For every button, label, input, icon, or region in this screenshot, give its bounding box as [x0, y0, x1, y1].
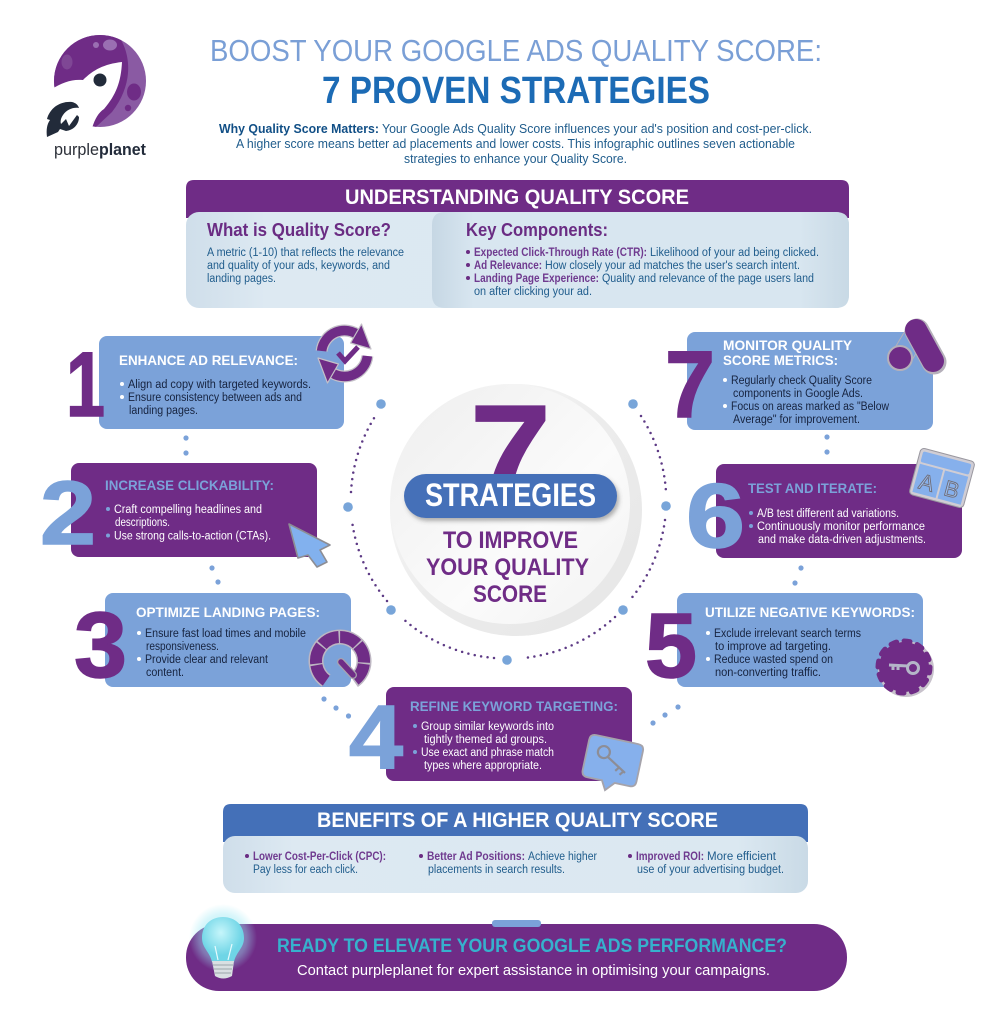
bullets: [749, 508, 926, 546]
bullets: Craft compelling headlines and: [114, 504, 262, 516]
call to action: [186, 904, 847, 991]
bullets: descriptions.: [115, 517, 170, 529]
bullets: landing pages.: [129, 405, 198, 417]
strategy 1: [66, 324, 371, 436]
heading: OPTIMIZE LANDING PAGES:: [136, 605, 320, 620]
icon: A/B test: A: [916, 469, 937, 497]
number: 3: [74, 593, 127, 697]
key components: [466, 220, 819, 298]
center badge: [390, 378, 642, 636]
key components: on after clicking your ad.: [474, 286, 592, 298]
icon: light bulb: [189, 904, 257, 978]
key components: Expected Click-Through Rate (CTR):: [474, 247, 647, 259]
heading: ENHANCE AD RELEVANCE:: [119, 353, 298, 368]
benefit: improved roi: [628, 851, 784, 876]
title line 1: BOOST YOUR GOOGLE ADS QUALITY SCORE:: [210, 33, 822, 68]
icon: cursor: [289, 524, 330, 567]
pill label: STRATEGIES: [425, 477, 596, 513]
panel body: [186, 212, 849, 308]
heading: SCORE METRICS:: [723, 353, 838, 368]
key components: Likelihood of your ad being clicked.: [650, 247, 819, 259]
logo rocket window: [94, 74, 106, 86]
benefit: better ad positions: Better Ad Positions:: [427, 851, 525, 863]
bullets: [413, 721, 554, 772]
icon: refresh check: [318, 324, 371, 383]
heading: [723, 338, 852, 368]
strategy 7: [665, 330, 934, 438]
bullets: Exclude irrelevant search terms: [714, 628, 861, 640]
icon: google ads: [888, 330, 934, 370]
key components: Key Components:: [466, 220, 608, 240]
panel header: [186, 180, 849, 218]
number: 1: [66, 334, 105, 436]
card: [105, 593, 351, 687]
cta text: Contact purpleplanet for expert assistance in optimising your campaigns.: [297, 962, 770, 979]
logo rocket flame: [47, 102, 79, 137]
panel title: BENEFITS OF A HIGHER QUALITY SCORE: [317, 809, 718, 832]
intro text: strategies to enhance your Quality Score.: [404, 151, 627, 166]
icon: gear with key: [878, 641, 934, 697]
key components: How closely your ad matches the user's search intent.: [545, 260, 800, 272]
bullets: responsiveness.: [146, 641, 219, 653]
benefit: improved roi: More efficient: [707, 851, 777, 863]
bullets: non-converting traffic.: [715, 667, 821, 679]
bullets: content.: [146, 667, 184, 679]
benefit: improved roi: use of your advertising budget.: [637, 864, 784, 876]
number: 4: [349, 688, 403, 788]
benefit: lower cpc: [245, 851, 386, 876]
strategy 6: [686, 448, 975, 567]
bullets: [706, 628, 861, 679]
strategy 2: [40, 463, 330, 567]
bullets: Regularly check Quality Score: [731, 375, 872, 387]
intro text: Why Quality Score Matters:: [219, 121, 379, 136]
bullets: Align ad copy with targeted keywords.: [128, 379, 311, 391]
cta heading: READY TO ELEVATE YOUR GOOGLE ADS PERFORMANCE?: [277, 936, 787, 957]
number: 5: [645, 595, 697, 697]
icon: speed gauge: [307, 628, 373, 694]
heading: TEST AND ITERATE:: [748, 481, 877, 496]
header title: UNDERSTANDING QUALITY SCORE: [345, 186, 689, 209]
bullets: [137, 628, 306, 679]
logo wordmark: purple: [54, 140, 99, 159]
bullets: [106, 504, 271, 542]
panel body right: [432, 212, 849, 308]
logo moon: [54, 35, 146, 127]
strategy 3: [74, 593, 373, 697]
badge subtitle: SCORE: [473, 581, 547, 608]
key components: Quality and relevance of the page users land: [602, 273, 814, 285]
number: 2: [40, 464, 96, 564]
heading: INCREASE CLICKABILITY:: [105, 478, 274, 493]
bullets: Provide clear and relevant: [145, 654, 269, 666]
what is quality score: landing pages.: [207, 273, 276, 285]
bullets: A/B test different ad variations.: [757, 508, 899, 520]
bullets: Reduce wasted spend on: [714, 654, 833, 666]
logo wordmark: planet: [99, 140, 146, 159]
bullets: [120, 379, 311, 417]
card: [687, 332, 933, 430]
benefit: better ad positions: placements in search results.: [428, 864, 565, 876]
what is quality score: A metric (1-10) that reflects the relevance: [207, 247, 404, 259]
bullets: Ensure consistency between ads and: [128, 392, 302, 404]
bullets: Average" for improvement.: [733, 414, 860, 426]
cta bar: [186, 924, 847, 991]
bullets: and make data-driven adjustments.: [758, 534, 926, 546]
title line 2: 7 PROVEN STRATEGIES: [322, 70, 710, 112]
logo: purpleplanet: [47, 35, 146, 159]
heading: UTILIZE NEGATIVE KEYWORDS:: [705, 605, 915, 620]
bullets: to improve ad targeting.: [715, 641, 831, 653]
bullets: Use strong calls-to-action (CTAs).: [114, 530, 271, 542]
badge outer ring: [390, 384, 642, 636]
bullets: [723, 375, 890, 426]
bullets: Group similar keywords into: [421, 721, 554, 733]
strategies pill: [404, 474, 617, 518]
badge subtitle: TO IMPROVE: [443, 527, 578, 554]
what is quality score: What is Quality Score?: [207, 220, 391, 240]
icon: A/B test: B: [941, 475, 962, 503]
badge inner disc: [390, 384, 630, 624]
connector dots: [183, 434, 830, 726]
badge subtitle: YOUR QUALITY: [426, 554, 589, 581]
panel body: [223, 836, 808, 893]
what is quality score: [207, 220, 404, 285]
benefit: lower cpc: Lower Cost-Per-Click (CPC):: [253, 851, 386, 863]
center dotted ring: [343, 399, 671, 665]
intro text: Your Google Ads Quality Score influences your ad's position and cost-per-click.: [382, 121, 812, 136]
icon: A/B test: [909, 448, 975, 508]
card: [716, 464, 962, 558]
bullets: types where appropriate.: [424, 760, 542, 772]
panel header: [223, 804, 808, 842]
badge subtitle: [426, 527, 589, 608]
logo rocket body: [50, 62, 122, 132]
benefit: lower cpc: Pay less for each click.: [253, 864, 358, 876]
key components: Landing Page Experience:: [474, 273, 599, 285]
bullets: tightly themed ad groups.: [424, 734, 547, 746]
bullets: Use exact and phrase match: [421, 747, 554, 759]
intro text: A higher score means better ad placements and lower costs. This infographic outlines seven actionable: [236, 136, 795, 151]
what is quality score: and quality of your ads, keywords, and: [207, 260, 390, 272]
big seven: 7: [470, 378, 551, 525]
card: [386, 687, 632, 781]
intro text: [219, 121, 812, 166]
cta tab: [492, 920, 541, 927]
panel: benefits: [223, 804, 808, 893]
panel: understanding quality score: [186, 180, 849, 308]
benefit: improved roi: Improved ROI:: [636, 851, 704, 863]
heading: MONITOR QUALITY: [723, 338, 852, 353]
heading: REFINE KEYWORD TARGETING:: [410, 699, 618, 714]
icon: key bubble: [580, 734, 644, 796]
title: [210, 33, 822, 112]
strategy 4: [349, 687, 644, 796]
benefit: better ad positions: [419, 851, 597, 876]
bullets: Ensure fast load times and mobile: [145, 628, 306, 640]
strategy 5: [645, 593, 934, 697]
card: [71, 463, 317, 557]
card: [99, 336, 344, 429]
number: 7: [665, 332, 715, 438]
benefit: better ad positions: Achieve higher: [528, 851, 597, 863]
bullets: Continuously monitor performance: [757, 521, 925, 533]
number: 6: [686, 466, 745, 567]
bullets: components in Google Ads.: [733, 388, 863, 400]
card: [677, 593, 923, 687]
bullets: Focus on areas marked as "Below: [731, 401, 890, 413]
key components: Ad Relevance:: [474, 260, 542, 272]
